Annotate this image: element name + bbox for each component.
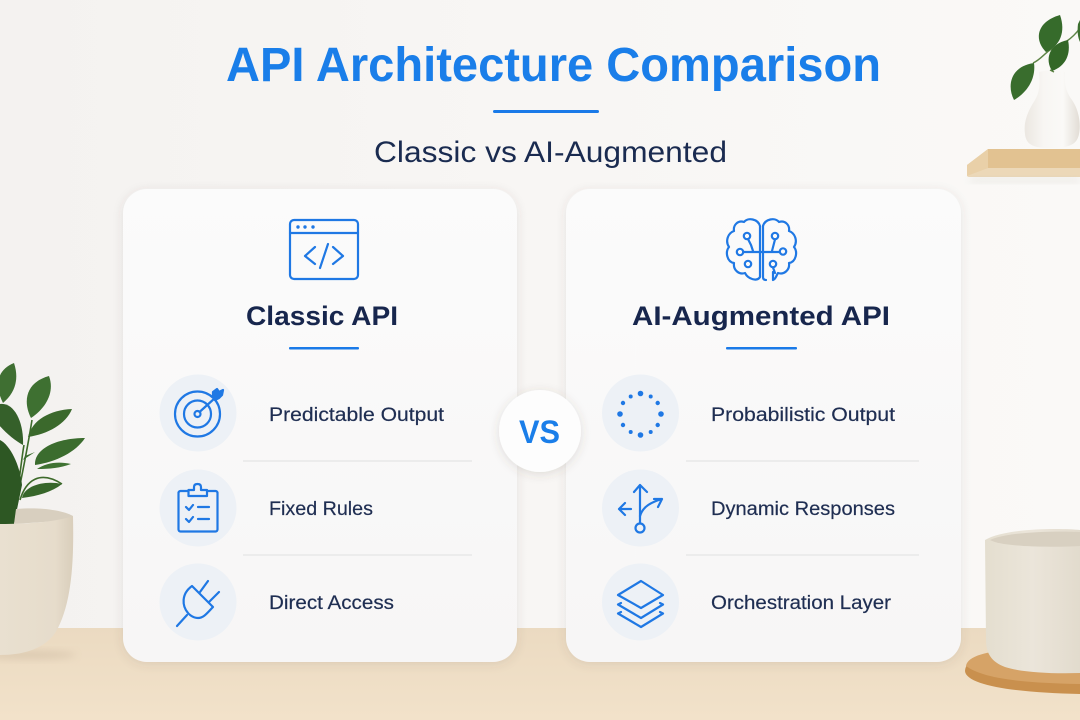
wooden table: [0, 628, 1080, 720]
title: API Architecture Comparison: [226, 39, 881, 92]
item: Fixed Rules: Fixed Rules: [269, 499, 373, 520]
item: Predictable Output: [160, 374, 445, 452]
potted plant: [0, 363, 85, 659]
mug on coaster: [965, 529, 1080, 694]
icon: browser code window: [290, 220, 358, 279]
item: Orchestration Layer: Orchestration Layer: [711, 593, 892, 614]
item: Dynamic Responses: Dynamic Responses: [711, 499, 895, 520]
item: Orchestration Layer: [602, 564, 892, 640]
mug: [985, 529, 1080, 673]
heading: AI-Augmented API: AI-Augmented API: [632, 301, 890, 331]
item: Dynamic Responses: [602, 470, 895, 546]
VS badge: [499, 390, 581, 472]
subtitle: Classic vs AI-Augmented: [374, 136, 727, 169]
vase leaves: [1033, 28, 1080, 72]
coaster: [965, 649, 1080, 694]
item: Probabilistic Output: [602, 374, 896, 452]
item: Predictable Output: Predictable Output: [269, 405, 445, 426]
vase: [1025, 70, 1080, 148]
item: Direct Access: [160, 564, 394, 640]
shelf: [967, 149, 1080, 177]
item: Fixed Rules: [160, 470, 373, 546]
item: Probabilistic Output: Probabilistic Output: [711, 405, 896, 426]
heading: Classic API: Classic API: [246, 301, 398, 331]
panel: AI-Augmented API: [566, 189, 961, 662]
VS badge: VS: [519, 414, 560, 450]
icon: brain circuit: [727, 219, 796, 280]
item: Direct Access: Direct Access: [269, 593, 394, 614]
shelf with vase: [967, 15, 1080, 182]
panel: Classic API: [123, 189, 517, 662]
